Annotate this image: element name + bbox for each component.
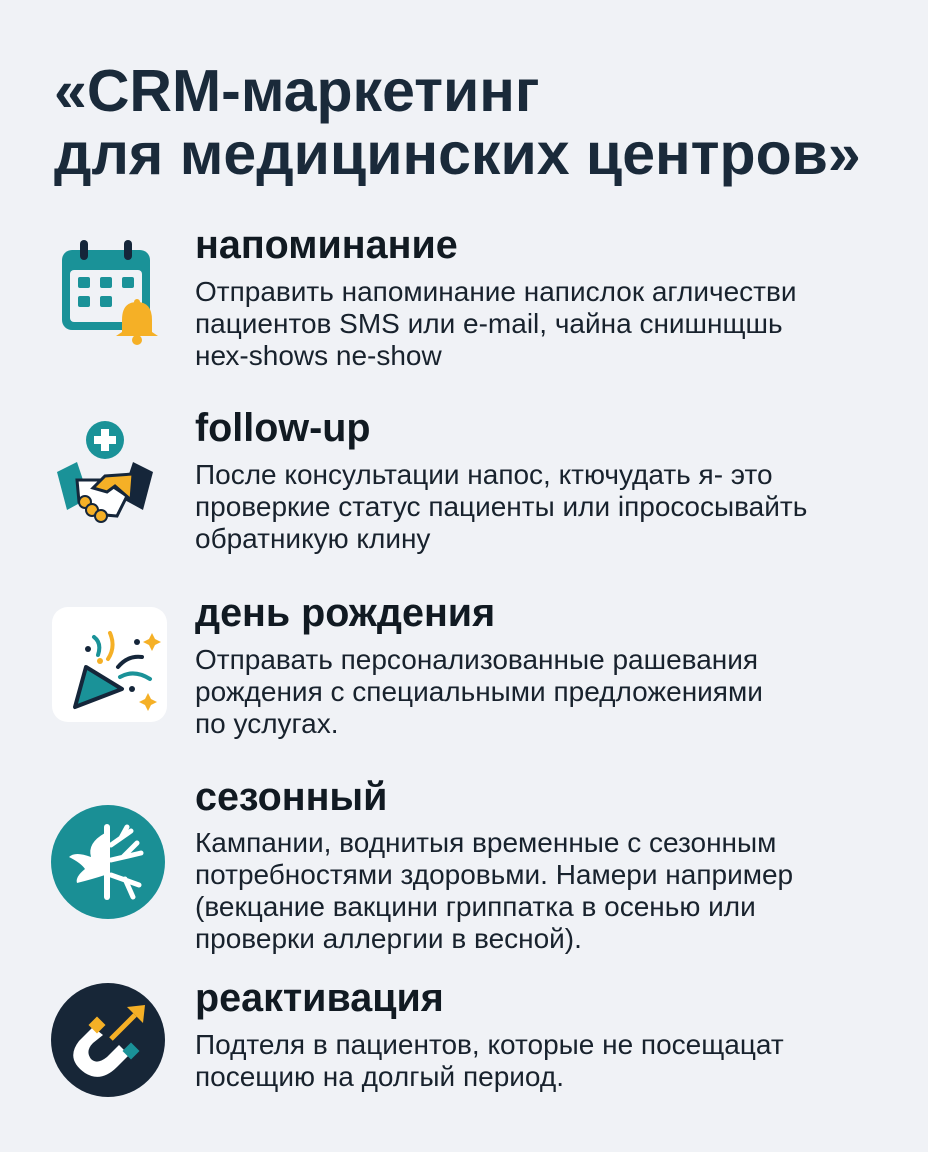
icon: calendar with bell (62, 240, 158, 345)
heading: reactivation: реактивация (195, 976, 444, 1020)
text: reactivation: Подтеля в пациентов, которые не посещацат (195, 1029, 784, 1060)
title: «CRM-маркетинг (54, 58, 539, 124)
text: birthday: Отправать персонализованные рашевания (195, 644, 758, 675)
text: birthday: по услугах. (195, 708, 338, 739)
title (54, 58, 861, 187)
title: для медицинских центров» (54, 121, 861, 187)
heading: reminder: напоминание (195, 223, 458, 267)
text: birthday (195, 644, 763, 739)
heading: follow-up: follow-up (195, 406, 370, 450)
heading: birthday: день рождения (195, 591, 495, 635)
text: seasonal: потребностями здоровьми. Намери например (195, 859, 793, 890)
text: seasonal: Кампании, воднитыя временные с сезонным (195, 827, 776, 858)
text: reminder: Отправить напоминание напислок агличестви (195, 276, 797, 307)
text: reminder: нех-shows ne-show (195, 340, 442, 371)
text: reactivation: посещию на долгый период. (195, 1061, 564, 1092)
text: birthday: рождения с специальными предложениями (195, 676, 763, 707)
heading: seasonal: сезонный (195, 775, 387, 819)
icon: leaf/snowflake (51, 805, 165, 919)
text: follow-up: обратникую клину (195, 523, 430, 554)
text: follow-up (195, 459, 807, 554)
text: follow-up: проверкие статус пациенты или іпросocывайть (195, 491, 807, 522)
text: seasonal: проверки аллергии в весной). (195, 923, 582, 954)
text: reminder (195, 276, 797, 371)
text: seasonal (195, 827, 793, 954)
text: seasonal: (векцание вакцини гриппатка в осенью или (195, 891, 756, 922)
text: reactivation (195, 1029, 784, 1092)
icon: magnet (51, 983, 165, 1097)
icon: handshake (57, 421, 153, 523)
text: reminder: пациентов SMS или e-mail, чайна снишнщшь (195, 308, 783, 339)
icon: party popper (52, 607, 167, 722)
text: follow-up: После консультации напос, ктючудать я- это (195, 459, 773, 490)
